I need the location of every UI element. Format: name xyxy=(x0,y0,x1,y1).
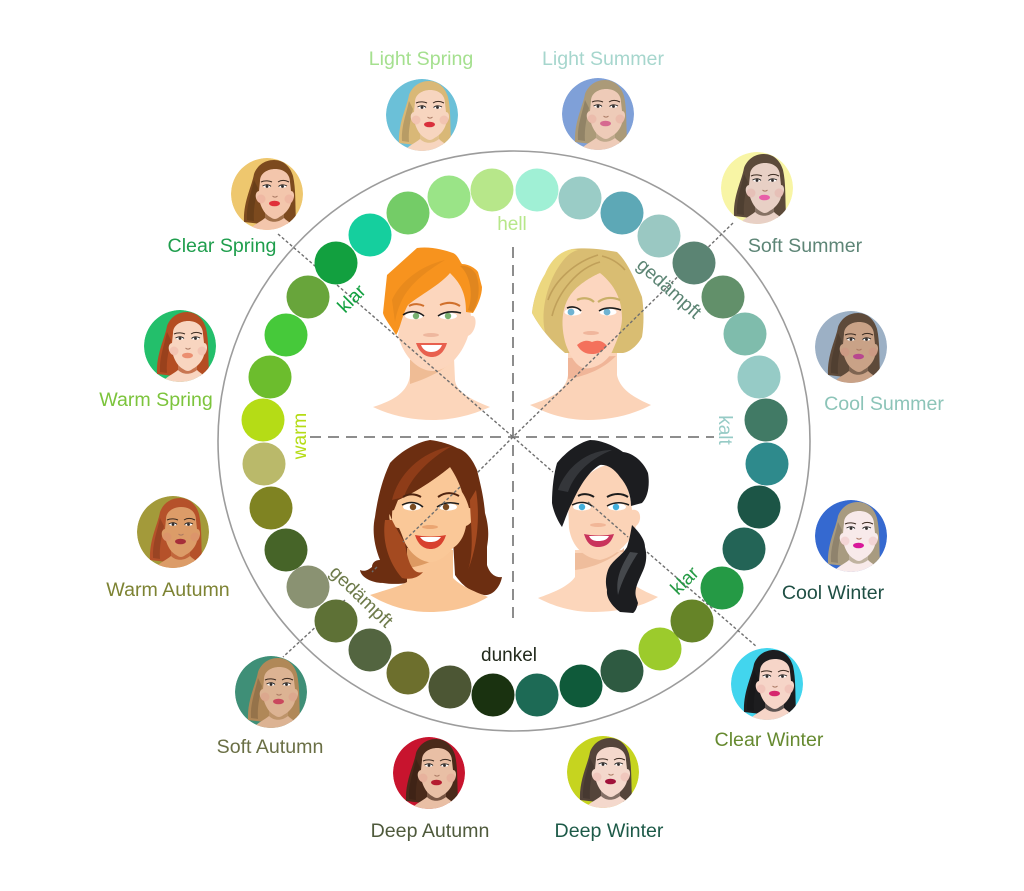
avatar: Warm Spring xyxy=(144,310,216,384)
inner label: klar top left: klar xyxy=(334,280,371,317)
label: Clear Winter: Clear Winter xyxy=(715,729,824,751)
colour swatch ring xyxy=(242,168,788,716)
label: Deep Winter: Deep Winter xyxy=(555,820,664,842)
label: Soft Summer: Soft Summer xyxy=(748,235,863,257)
outer ring xyxy=(218,151,810,731)
avatar: Deep Autumn xyxy=(393,737,465,811)
label: Clear Spring: Clear Spring xyxy=(168,235,276,257)
avatar: Deep Winter xyxy=(567,736,639,810)
avatar: Clear Spring xyxy=(231,158,303,232)
avatar: Clear Winter xyxy=(731,648,803,722)
label: Light Summer: Light Summer xyxy=(542,48,664,70)
avatar: Cool Winter xyxy=(815,500,887,574)
inner label: gedämpft top right: gedämpft xyxy=(632,255,706,324)
label: Deep Autumn: Deep Autumn xyxy=(371,820,489,842)
avatar: Warm Autumn xyxy=(137,496,209,570)
face: light blonde summer woman xyxy=(530,248,651,420)
label: Warm Spring: Warm Spring xyxy=(99,389,213,411)
avatar: Cool Summer xyxy=(815,311,887,385)
label: Light Spring: Light Spring xyxy=(369,48,473,70)
dashed axes: warm-cold and light-dark xyxy=(310,247,714,623)
inner label: kalt: kalt xyxy=(714,415,735,445)
face: light orange-haired spring woman xyxy=(373,247,490,420)
face: deep black-haired winter woman xyxy=(538,440,658,613)
seasonal colour wheel infographic xyxy=(99,51,944,841)
inner label: hell: hell xyxy=(497,214,527,235)
label: Cool Summer: Cool Summer xyxy=(824,393,944,415)
inner label: warm: warm xyxy=(290,413,311,460)
avatar: Soft Summer xyxy=(721,152,793,226)
label: Warm Autumn: Warm Autumn xyxy=(106,579,230,601)
avatar: Soft Autumn xyxy=(235,656,307,730)
avatar: Light Summer xyxy=(562,78,634,152)
label: Soft Autumn: Soft Autumn xyxy=(217,736,323,758)
inner label: klar bottom right: klar xyxy=(667,562,704,599)
inner label: dunkel: dunkel xyxy=(481,645,537,666)
face: deep brown-haired autumn woman xyxy=(360,440,502,612)
inner label: gedämpft bottom left: gedämpft xyxy=(325,562,397,633)
diagonal dotted lines linking soft and clear types xyxy=(278,223,757,657)
label: Cool Winter: Cool Winter xyxy=(782,582,885,604)
avatar: Light Spring xyxy=(386,79,458,153)
